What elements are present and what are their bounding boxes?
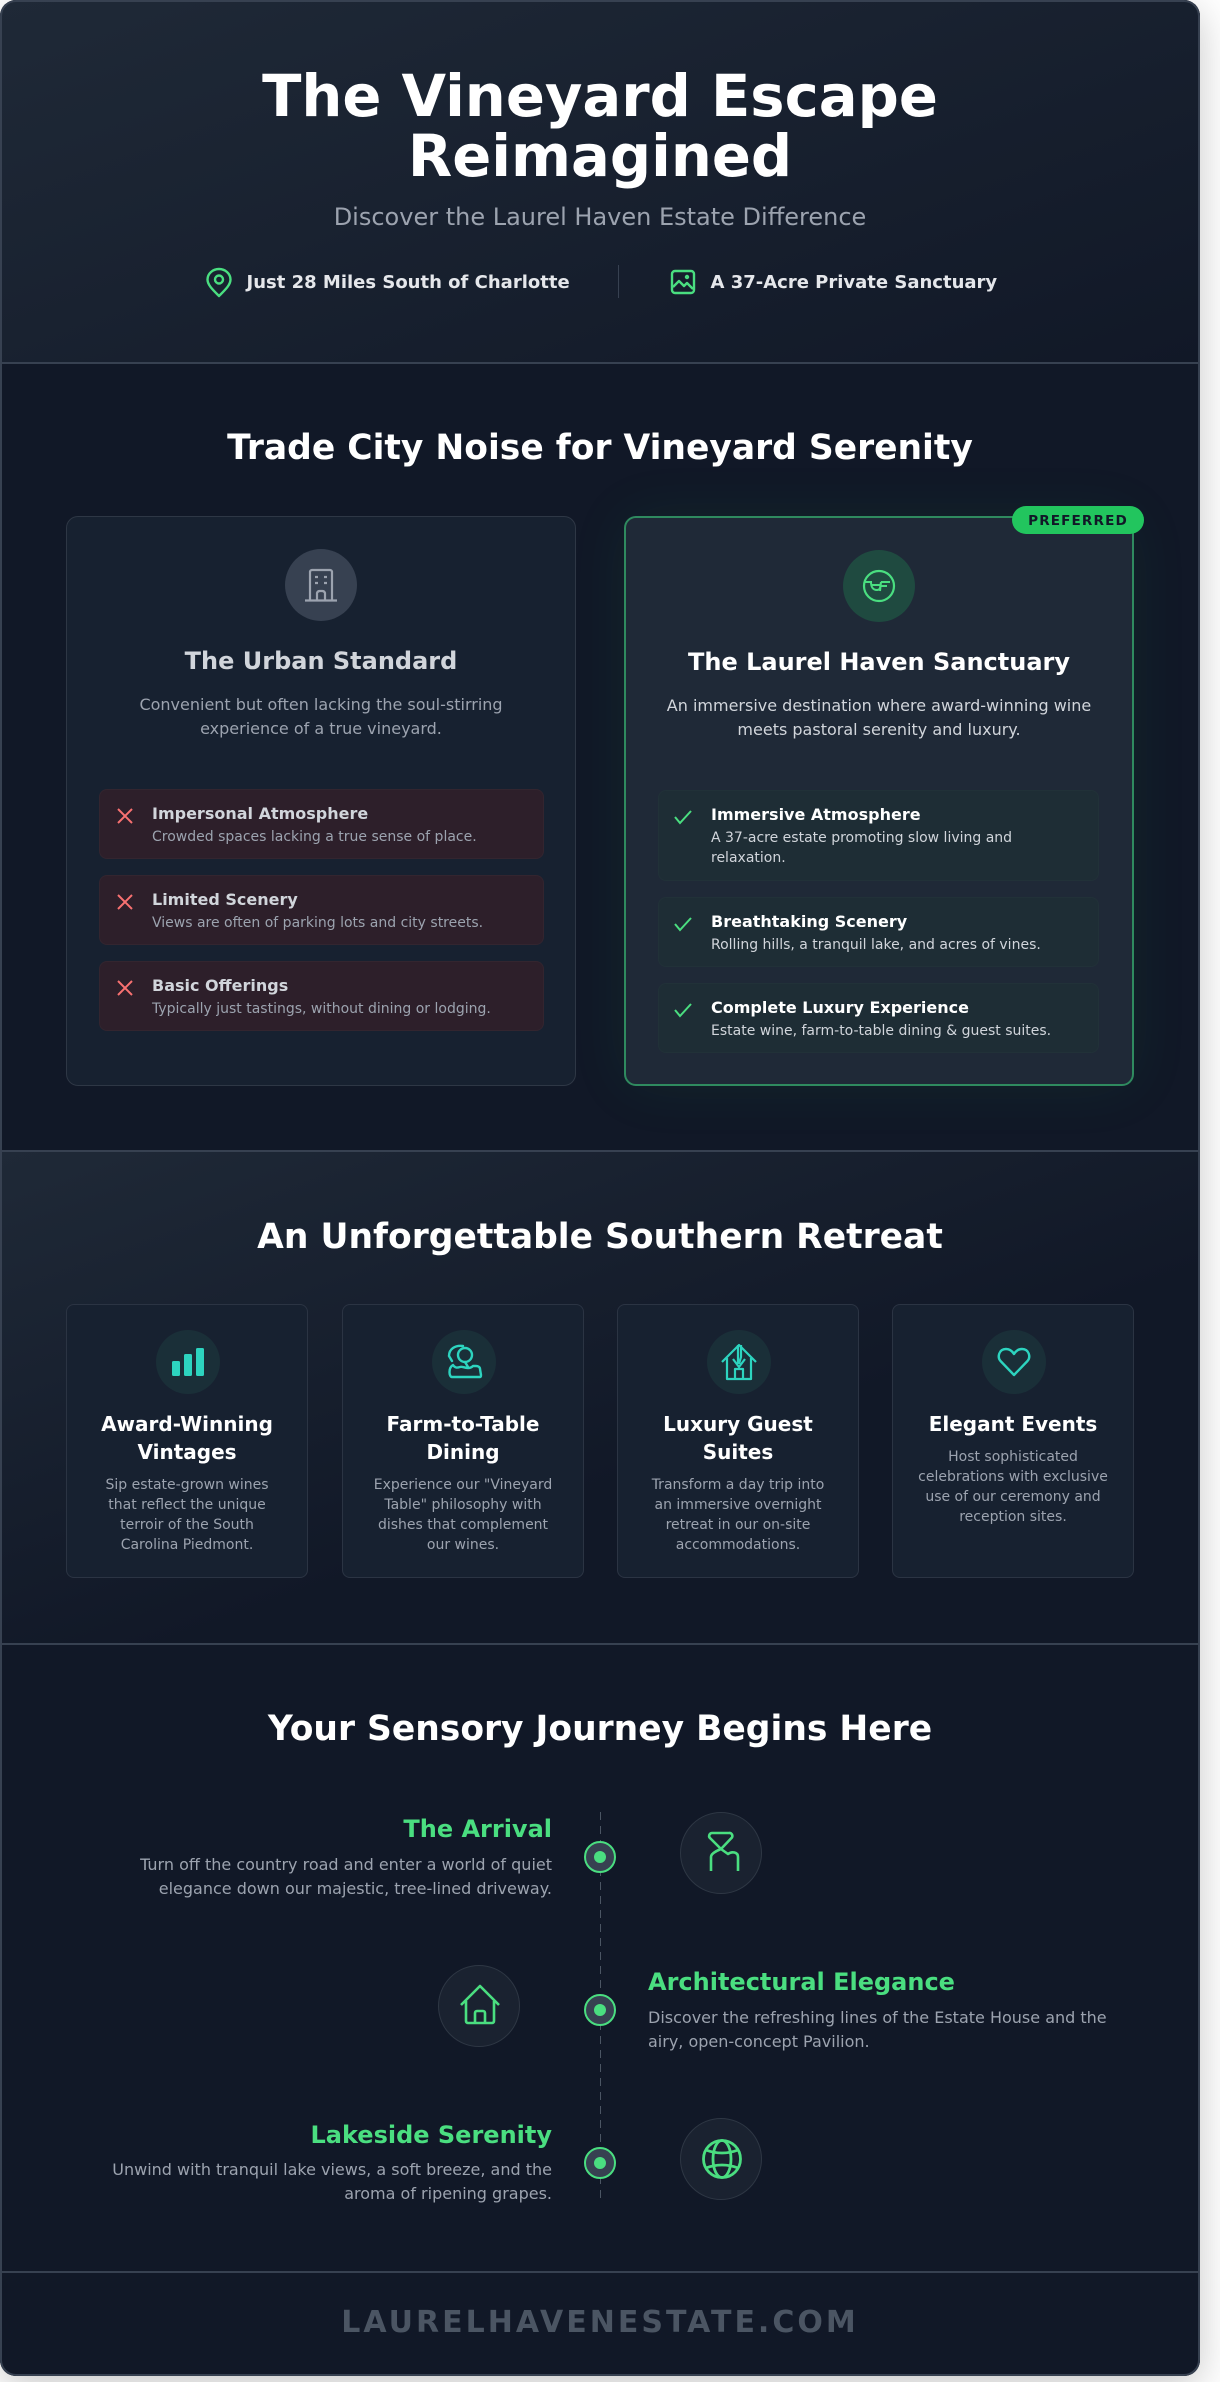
step: lakeside serenity <box>112 2118 762 2203</box>
card description: that reflect the unique <box>108 1497 266 1513</box>
icon: cross <box>117 808 133 824</box>
step description: Turn off the country road and enter a world of quiet <box>140 1855 552 1874</box>
item text <box>152 976 491 1017</box>
item text <box>152 804 477 845</box>
panel: farm-to-table dining <box>342 1304 584 1578</box>
card description <box>652 1477 824 1553</box>
item text: Immersive Atmosphere <box>711 805 921 824</box>
card title: Vintages <box>137 1440 237 1464</box>
icon: map pin <box>206 268 232 298</box>
card description: An immersive destination where award-winning wine <box>667 696 1091 715</box>
card description: Carolina Piedmont. <box>121 1537 253 1553</box>
badge: preferred <box>1012 506 1144 534</box>
divider <box>618 265 619 298</box>
heading: Your Sensory Journey Begins Here <box>268 1709 932 1749</box>
step description: Discover the refreshing lines of the Estate House and the <box>648 2008 1107 2027</box>
card description: Table" philosophy with <box>384 1497 542 1513</box>
card description: terroir of the South <box>120 1517 254 1533</box>
step description: elegance down our majestic, tree-lined driveway. <box>159 1879 552 1898</box>
card description <box>139 695 503 738</box>
item text <box>152 890 483 931</box>
website: LAURELHAVENESTATE.COM <box>341 2305 859 2340</box>
card description: our wines. <box>427 1537 499 1553</box>
card description: an immersive overnight <box>655 1497 821 1513</box>
icon: figure <box>680 1812 762 1894</box>
timeline dot <box>584 1841 616 1873</box>
title <box>262 63 938 190</box>
step title: Architectural Elegance <box>648 1968 955 1996</box>
card title <box>101 1412 273 1464</box>
icon: landscape image <box>670 270 696 294</box>
card title: Farm-to-Table <box>387 1412 539 1436</box>
step description <box>140 1855 552 1898</box>
panel: urban standard <box>66 516 576 1086</box>
item text: Breathtaking Scenery <box>711 912 907 931</box>
badge: preferred: PREFERRED <box>1028 513 1128 529</box>
section: southern retreat <box>0 1152 1200 1645</box>
icon: cross <box>117 980 133 996</box>
card title: The Urban Standard <box>185 647 457 675</box>
item text: Complete Luxury Experience <box>711 998 969 1017</box>
card description: celebrations with exclusive <box>918 1469 1108 1485</box>
panel: award-winning vintages <box>66 1304 308 1578</box>
icon: bar chart <box>156 1330 220 1394</box>
step: the arrival <box>140 1812 762 1898</box>
card title <box>387 1412 539 1464</box>
item: breathtaking scenery <box>658 897 1099 967</box>
section: comparison <box>0 364 1200 1152</box>
item text: Views are often of parking lots and city streets. <box>152 915 483 931</box>
title: The Vineyard Escape <box>262 63 938 130</box>
card title: Elegant Events <box>929 1412 1097 1436</box>
step description: Unwind with tranquil lake views, a soft breeze, and the <box>112 2160 552 2179</box>
step title: Lakeside Serenity <box>310 2121 552 2149</box>
item: limited scenery <box>99 875 544 945</box>
card description: Transform a day trip into <box>652 1477 824 1493</box>
item text <box>711 998 1051 1039</box>
acreage text: A 37-Acre Private Sanctuary <box>710 272 997 293</box>
timeline line <box>600 1812 601 2204</box>
card description: reception sites. <box>959 1509 1067 1525</box>
step description <box>648 2008 1107 2051</box>
item text: Rolling hills, a tranquil lake, and acres of vines. <box>711 937 1041 953</box>
card description: Host sophisticated <box>948 1449 1078 1465</box>
item text: relaxation. <box>711 850 786 866</box>
step: architectural elegance <box>438 1965 1107 2051</box>
panel: elegant events <box>892 1304 1134 1578</box>
item: impersonal atmosphere <box>99 789 544 859</box>
icon: house <box>438 1965 520 2047</box>
card description <box>105 1477 269 1553</box>
item text: Basic Offerings <box>152 976 288 995</box>
item text: Impersonal Atmosphere <box>152 804 368 823</box>
item text: Typically just tastings, without dining or lodging. <box>152 1001 491 1017</box>
card description: retreat in our on-site <box>666 1517 810 1533</box>
card description: experience of a true vineyard. <box>200 719 442 738</box>
location text: Just 28 Miles South of Charlotte <box>246 272 570 293</box>
item text: Estate wine, farm-to-table dining & guest suites. <box>711 1023 1051 1039</box>
step title: The Arrival <box>403 1815 552 1843</box>
item text: Limited Scenery <box>152 890 298 909</box>
timeline dot <box>584 2147 616 2179</box>
item: basic offerings <box>99 961 544 1031</box>
card description: Experience our "Vineyard <box>374 1477 552 1493</box>
icon: cross <box>117 894 133 910</box>
card title: Luxury Guest <box>663 1412 813 1436</box>
icon: check <box>674 810 692 824</box>
step description: aroma of ripening grapes. <box>344 2184 552 2203</box>
card description: Convenient but often lacking the soul-stirring <box>139 695 503 714</box>
card title <box>663 1412 813 1464</box>
card title: Dining <box>426 1440 500 1464</box>
card description <box>374 1477 552 1553</box>
panel: luxury guest suites <box>617 1304 859 1578</box>
item text: A 37-acre estate promoting slow living and <box>711 830 1012 846</box>
heading: An Unforgettable Southern Retreat <box>257 1217 943 1257</box>
card title: Award-Winning <box>101 1412 273 1436</box>
title: Reimagined <box>408 123 792 190</box>
icon: globe <box>680 2118 762 2200</box>
item: immersive atmosphere <box>658 790 1099 881</box>
icon: check <box>674 917 692 932</box>
item: complete luxury experience <box>658 983 1099 1053</box>
section: sensory journey <box>0 1645 1200 2273</box>
card description <box>918 1449 1108 1525</box>
footer <box>0 2273 1200 2376</box>
card description <box>666 696 1091 739</box>
icon: house with cutlery <box>707 1330 771 1394</box>
card description: use of our ceremony and <box>925 1489 1101 1505</box>
card description: Sip estate-grown wines <box>105 1477 269 1493</box>
card title: Suites <box>703 1440 773 1464</box>
header section <box>0 0 1200 364</box>
icon: dining <box>432 1330 496 1394</box>
heading: Trade City Noise for Vineyard Serenity <box>227 428 973 468</box>
step description: airy, open-concept Pavilion. <box>648 2032 870 2051</box>
icon: wine emblem <box>843 550 915 622</box>
card description: meets pastoral serenity and luxury. <box>737 720 1021 739</box>
card description: accommodations. <box>676 1537 800 1553</box>
icon: check <box>674 1003 692 1018</box>
subtitle: Discover the Laurel Haven Estate Difference <box>334 203 866 231</box>
panel: laurel haven sanctuary <box>624 516 1134 1086</box>
card title: The Laurel Haven Sanctuary <box>688 648 1070 676</box>
item text <box>711 805 1012 866</box>
card description: dishes that complement <box>378 1517 548 1533</box>
icon: heart <box>982 1330 1046 1394</box>
timeline dot <box>584 1994 616 2026</box>
icon: building <box>285 549 357 621</box>
item text <box>711 912 1041 953</box>
item text: Crowded spaces lacking a true sense of place. <box>152 829 477 845</box>
step description <box>112 2160 552 2203</box>
